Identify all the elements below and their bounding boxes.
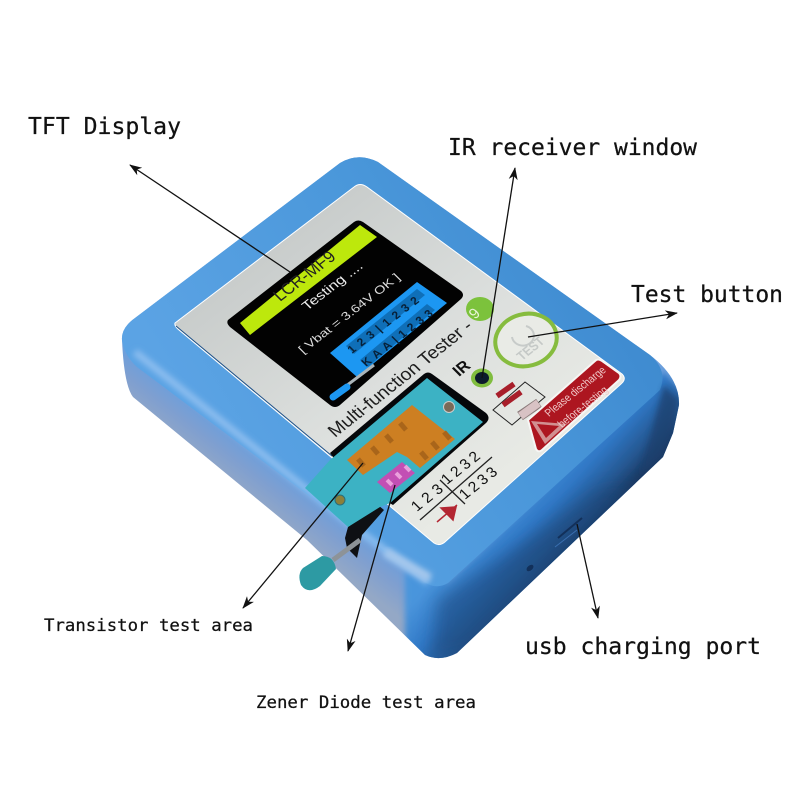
socket screw top xyxy=(444,402,454,412)
pinout legend: 123 xyxy=(408,481,447,515)
screen title: LCR-MF9 xyxy=(269,247,340,305)
arrow: transistor test area xyxy=(243,463,363,608)
IR label: IR xyxy=(449,357,475,380)
green number badge xyxy=(465,297,494,322)
panel lower-left edge line xyxy=(176,326,332,456)
device top face xyxy=(122,157,662,586)
pinout legend: 1233 xyxy=(456,464,501,503)
socket screw bottom xyxy=(335,495,345,505)
teal lever plate xyxy=(305,378,483,527)
bottom corner dark shading xyxy=(425,492,623,658)
top face lower highlight xyxy=(135,352,428,582)
label: IR receiver window: IR receiver window xyxy=(448,135,697,161)
pinout legend: 1232 xyxy=(438,448,484,488)
discharge warning label: Please discharge xyxy=(543,365,609,419)
right corner and edge shading, clipped to the body xyxy=(135,352,678,582)
orange contact slots xyxy=(358,423,450,466)
arrow: zener diode test area xyxy=(348,485,395,651)
arrow: TFT display xyxy=(130,165,290,272)
gray label panel xyxy=(175,184,624,545)
arrow: usb charging port xyxy=(577,524,598,618)
corner highlight xyxy=(385,552,430,578)
arrow: IR receiver window xyxy=(482,168,515,378)
USB port slot lower edge xyxy=(555,530,577,547)
testing text: Testing .... xyxy=(298,259,366,313)
screen black bezel xyxy=(227,220,463,407)
product name: Multi-function Tester - xyxy=(324,316,477,441)
discharge warning label xyxy=(528,360,620,451)
label: usb charging port: usb charging port xyxy=(525,634,761,660)
lever shaft xyxy=(333,540,360,560)
green number badge: 9 xyxy=(465,305,484,322)
diode symbol xyxy=(437,505,457,522)
capacitor symbol xyxy=(493,382,545,425)
label: Transistor test area: Transistor test area xyxy=(44,616,253,636)
arrow: test button xyxy=(528,313,677,337)
IR receiver window xyxy=(471,368,493,388)
socket black frame xyxy=(330,372,488,505)
lever dark mount xyxy=(345,505,384,558)
yellow title bar xyxy=(240,225,377,335)
battery voltage text: [ Vbat = 3.64V OK ] xyxy=(297,272,403,356)
right side shading xyxy=(405,372,690,670)
right corner dark shading xyxy=(646,384,679,460)
purple zener contacts xyxy=(377,462,415,493)
component test socket xyxy=(299,372,488,590)
pin map row 1: 123|1232 xyxy=(346,295,422,356)
test button: TEST xyxy=(513,334,548,363)
USB port slot xyxy=(558,518,582,538)
pin map row 2: KAA|1233 xyxy=(360,308,437,369)
TFT screen xyxy=(227,220,463,407)
progress bar xyxy=(333,365,374,397)
infographic canvas xyxy=(28,116,782,708)
pinout legend xyxy=(408,448,501,522)
device: multi-function tester xyxy=(122,157,690,670)
test button xyxy=(489,307,563,373)
device left side face xyxy=(122,157,679,658)
discharge warning label: before-testing xyxy=(556,384,611,430)
orange test contacts xyxy=(347,405,455,475)
small hole xyxy=(525,564,535,572)
lever knob xyxy=(299,556,336,590)
device right side face, clipped to the body xyxy=(405,372,690,670)
purple contact slots xyxy=(387,466,410,485)
label: Test button: Test button xyxy=(631,282,783,308)
blue pin map area xyxy=(330,282,447,377)
label: TFT Display: TFT Display xyxy=(28,114,181,140)
label: Zener Diode test area: Zener Diode test area xyxy=(256,693,476,713)
